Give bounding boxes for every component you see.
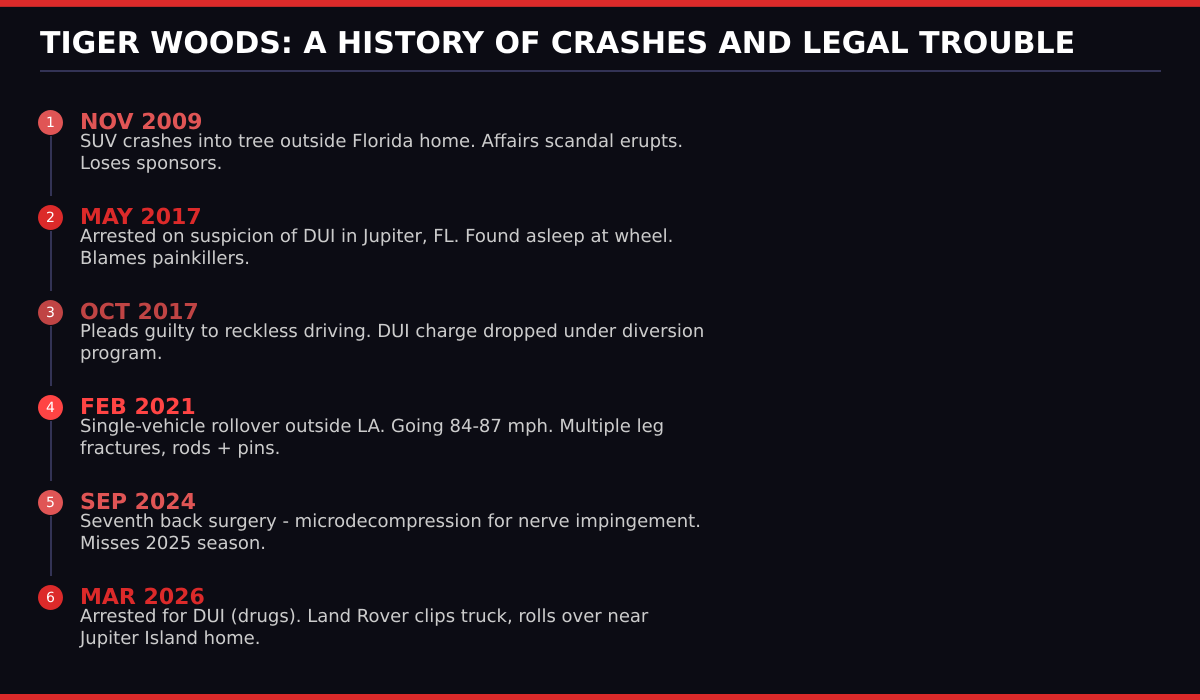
description 1 [80,131,683,174]
description 6 [79,606,648,649]
connector 3 [50,326,52,386]
timeline entry 6 [38,585,648,649]
description 3: program. [80,343,163,364]
description 1: SUV crashes into tree outside Florida home. Affairs scandal erupts. [80,131,683,152]
description 6: Jupiter Island home. [80,628,260,649]
marker 2 [38,205,63,230]
marker 1: 1 [46,115,55,131]
top accent bar [0,0,1200,7]
description 3: Pleads guilty to reckless driving. DUI charge dropped under diversion [80,321,704,342]
connector 1 [50,136,52,196]
description 2 [80,226,673,269]
bottom accent bar [0,694,1200,700]
marker 6 [38,585,63,610]
marker 6: 6 [46,590,55,606]
date 6: MAR 2026 [80,585,205,610]
date 4: FEB 2021 [80,395,196,420]
connector 4 [50,421,52,481]
marker 4 [38,395,63,420]
description 5 [80,511,701,554]
date 2: MAY 2017 [80,205,202,230]
marker 5: 5 [46,495,55,511]
title: TIGER WOODS: A HISTORY OF CRASHES AND LEGAL TROUBLE [40,26,1075,61]
marker 5 [38,490,63,515]
marker 3 [38,300,63,325]
description 4 [80,416,664,459]
title divider [40,70,1161,72]
description 4: fractures, rods + pins. [80,438,280,459]
timeline entry 4 [38,395,664,481]
timeline entry 2 [38,205,673,291]
description 4: Single-vehicle rollover outside LA. Going 84-87 mph. Multiple leg [80,416,664,437]
description 5: Seventh back surgery - microdecompression for nerve impingement. [80,511,701,532]
description 1: Loses sponsors. [80,153,222,174]
date 3: OCT 2017 [80,300,199,325]
date 1: NOV 2009 [80,110,202,135]
description 3 [80,321,704,364]
description 2: Blames painkillers. [80,248,250,269]
description 6: Arrested for DUI (drugs). Land Rover clips truck, rolls over near [80,606,648,627]
description 2: Arrested on suspicion of DUI in Jupiter, FL. Found asleep at wheel. [80,226,673,247]
description 5: Misses 2025 season. [80,533,266,554]
connector 5 [50,516,52,576]
marker 1 [38,110,63,135]
marker 2: 2 [46,210,55,226]
marker 4: 4 [46,400,55,416]
timeline entry 5 [38,490,701,576]
connector 2 [50,231,52,291]
timeline entry 1 [38,110,683,196]
marker 3: 3 [46,305,55,321]
date 5: SEP 2024 [80,490,196,515]
timeline entry 3 [38,300,704,386]
